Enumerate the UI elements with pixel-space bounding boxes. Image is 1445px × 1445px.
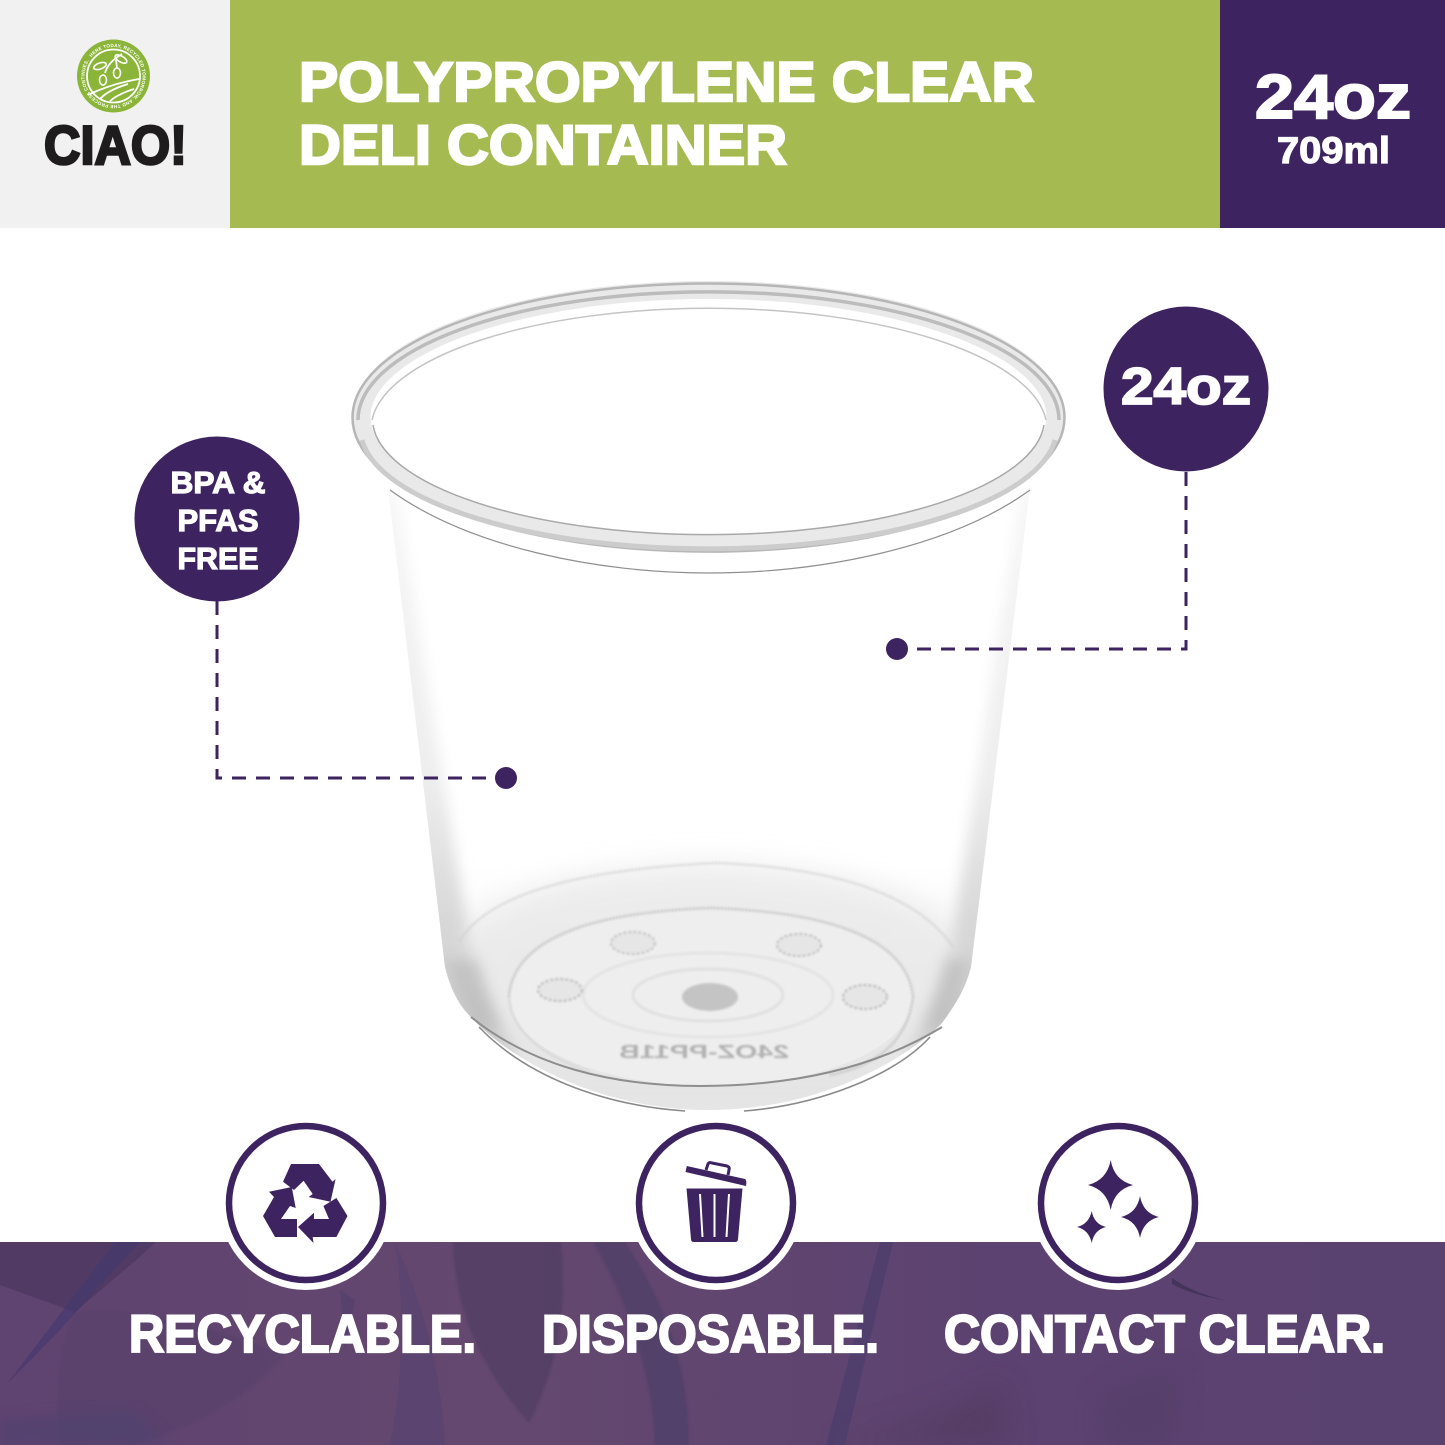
badge circle <box>134 436 300 602</box>
badge text: FREE <box>178 541 258 576</box>
label: CONTACT CLEAR. <box>944 1305 1385 1364</box>
icon: sparkles <box>1031 1116 1205 1290</box>
title <box>299 50 1034 176</box>
label: RECYCLABLE. <box>129 1305 476 1364</box>
title: DELI CONTAINER <box>299 113 787 176</box>
dashed leader line <box>217 601 506 778</box>
badge circle <box>1104 306 1268 472</box>
icon: recycle <box>219 1116 393 1290</box>
feature: disposable <box>542 1116 879 1364</box>
leader dot <box>495 767 517 789</box>
dashed leader line <box>897 472 1186 649</box>
badge text <box>170 465 266 576</box>
header: title panel <box>230 0 1220 228</box>
badge text: BPA & <box>170 465 266 500</box>
moulded base mark, mirrored: 24OZ-PP11B <box>619 1042 789 1062</box>
label: DISPOSABLE. <box>542 1305 879 1364</box>
size in ounces: 24oz <box>1255 63 1411 132</box>
title: POLYPROPYLENE CLEAR <box>299 50 1034 113</box>
container rim <box>352 284 1064 573</box>
container base <box>459 863 953 1111</box>
container body <box>352 284 1064 1111</box>
callout: BPA and PFAS free <box>134 436 517 789</box>
logo wordmark: CIAO! <box>44 114 187 176</box>
leader dot <box>886 638 908 660</box>
icon: trash can <box>629 1116 803 1290</box>
product photo: clear deli container <box>352 284 1064 1111</box>
header: logo panel <box>0 0 230 228</box>
bottom band with leaf texture <box>0 1242 1445 1445</box>
feature: recyclable <box>129 1116 476 1364</box>
callout: 24oz capacity <box>886 306 1268 660</box>
badge text: PFAS <box>178 503 258 538</box>
size in millilitres: 709ml <box>1277 130 1390 171</box>
feature: contact clear <box>944 1116 1385 1364</box>
badge text: 24oz <box>1121 358 1251 416</box>
header: size panel <box>1220 0 1445 228</box>
icon: olive badge: HERE TODAY, RECYCLED TOMORROW, AND THE PROCESS CONTINUES. <box>81 44 146 108</box>
